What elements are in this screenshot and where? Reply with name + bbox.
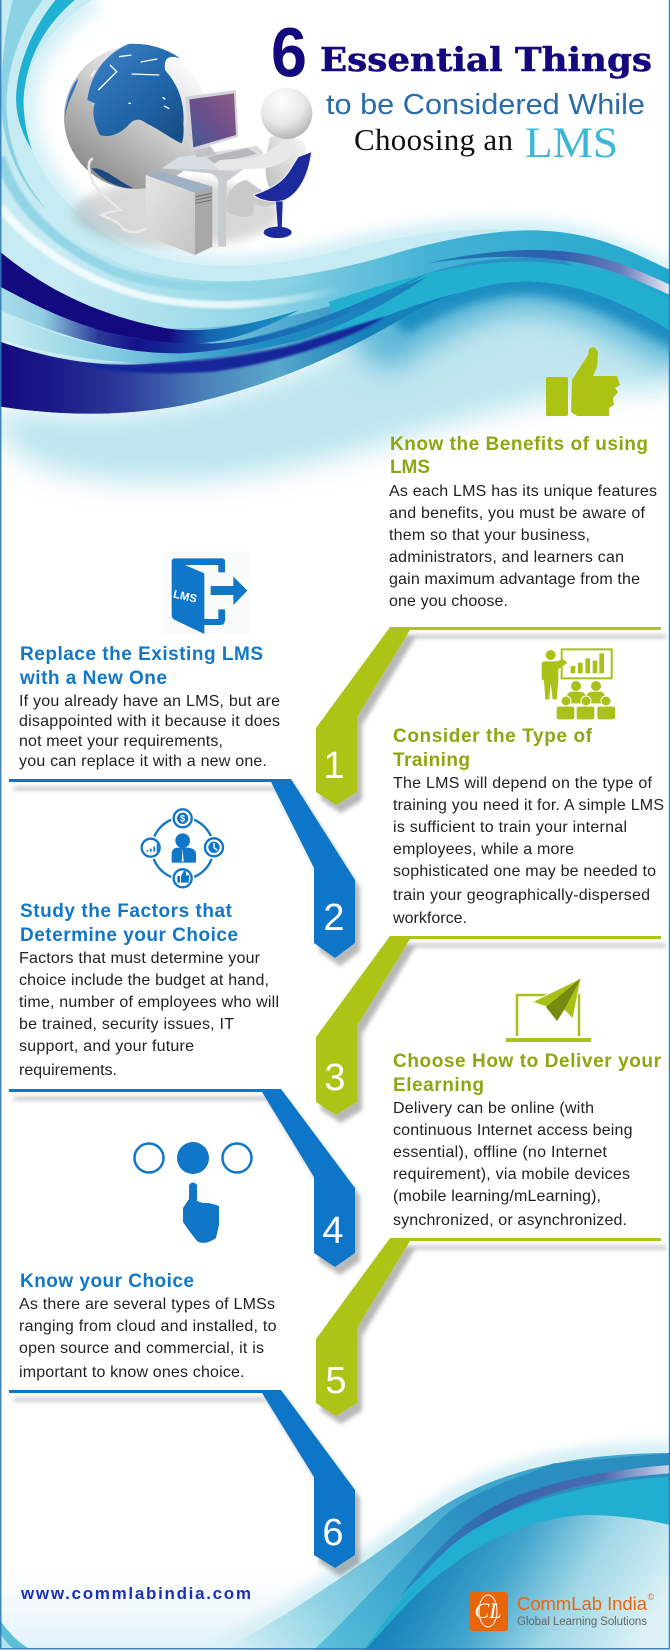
logo: CommLab India: [469, 1592, 655, 1631]
icon: computer tower: [146, 171, 212, 255]
body text: [389, 483, 657, 610]
logo name: CommLab India: [517, 1593, 648, 1614]
icon: desk: [162, 146, 263, 247]
header wave background: [0, 0, 670, 483]
title: to be Considered While: to be Considered While: [326, 89, 645, 121]
chevron 5: [316, 1238, 661, 1416]
panel: choose how to deliver: Elearning: [393, 1075, 484, 1096]
heading: Choose How to Deliver your: [393, 1051, 662, 1072]
panel: know the benefits: [389, 347, 657, 610]
body text: essential), offline (no Internet: [393, 1144, 608, 1161]
body text: gain maximum advantage from the: [389, 571, 640, 588]
body text: and benefits, you must be aware of: [389, 505, 646, 522]
icon: LMS door with arrow: LMS: [172, 589, 198, 606]
body text: requirements.: [19, 1062, 117, 1079]
panel: know the benefits: LMS: [390, 457, 430, 478]
body text: training you need it for. A simple LMS: [393, 797, 664, 814]
chevron 6: [9, 1390, 355, 1568]
body text: one you choose.: [389, 593, 508, 610]
body text: ranging from cloud and installed, to: [19, 1318, 277, 1335]
body text: As each LMS has its unique features: [389, 483, 657, 500]
body text: [392, 775, 664, 927]
icon: laptop with paper plane: [506, 978, 591, 1042]
heading: Study the Factors that: [20, 901, 233, 922]
floor shadow: [73, 180, 280, 247]
icon: presenter and audience: [542, 649, 615, 719]
title: LMS: LMS: [525, 120, 618, 167]
body text: synchronized, or asynchronized.: [393, 1212, 627, 1229]
heading: Consider the Type of: [393, 726, 593, 747]
chevron 4: [9, 1089, 355, 1267]
logo mark: CL: [475, 1598, 501, 1623]
icon: LMS door with arrow: [164, 552, 250, 634]
body text: disappointed with it because it does: [19, 713, 280, 730]
body text: Factors that must determine your: [19, 950, 261, 967]
body text: sophisticated one may be needed to: [393, 863, 656, 880]
body text: be trained, security issues, IT: [19, 1016, 234, 1033]
panel: choose how to deliver: [393, 978, 662, 1229]
body text: time, number of employees who will: [19, 994, 279, 1011]
chevron 2: 2: [323, 897, 345, 939]
chevron 2: [9, 779, 355, 958]
illustration: globe and person at computer: [64, 44, 312, 255]
chevron 3: 3: [324, 1057, 346, 1099]
body text: important to know ones choice.: [19, 1364, 244, 1381]
panel: consider the type of training: [392, 649, 664, 927]
chevron 6: 6: [322, 1512, 344, 1554]
chevron 1: 1: [323, 745, 345, 787]
body text: administrators, and learners can: [389, 549, 624, 566]
heading: Know your Choice: [20, 1271, 194, 1292]
body text: not meet your requirements,: [19, 733, 223, 750]
body text: (mobile learning/mLearning),: [393, 1188, 601, 1205]
body text: [19, 693, 280, 770]
icon: chair: [253, 152, 312, 238]
panel: replace the existing LMS: [19, 552, 280, 770]
chevron 1: [316, 627, 661, 805]
body text: you can replace it with a new one.: [19, 753, 267, 770]
registered mark: ©: [648, 1592, 655, 1602]
heading: Replace the Existing LMS: [20, 644, 263, 665]
chevron 4: 4: [322, 1210, 344, 1252]
body text: Delivery can be online (with: [393, 1100, 594, 1117]
body text: As there are several types of LMSs: [19, 1296, 275, 1313]
body text: requirement), via mobile devices: [393, 1166, 630, 1183]
body text: [393, 1100, 632, 1229]
website url: www.commlabindia.com: [20, 1584, 251, 1603]
body text: [19, 950, 279, 1079]
icon: cable: [89, 158, 147, 232]
body text: train your geographically-dispersed: [393, 887, 650, 904]
body text: choice include the budget at hand,: [19, 972, 269, 989]
body text: open source and commercial, it is: [19, 1340, 264, 1357]
panel: replace the existing LMS: with a New One: [19, 668, 167, 689]
panel: know your choice: [19, 1142, 277, 1381]
panel: consider the type of training: Training: [393, 750, 470, 771]
chevron 3: [316, 936, 661, 1115]
title: number 6: 6: [271, 14, 307, 92]
icon: thumbs up: [546, 347, 620, 416]
icon: selecting option with finger: [134, 1142, 252, 1243]
title: Essential Things: Essential Things: [320, 40, 652, 79]
body text: them so that your business,: [389, 527, 590, 544]
body text: support, and your future: [19, 1038, 194, 1055]
icon: person with factor circles: $: [180, 814, 185, 824]
panel: study the factors: Determine your Choice: [20, 925, 238, 946]
icon: globe: [64, 44, 207, 189]
logo mark: [469, 1592, 508, 1631]
title: Choosing an: Choosing an: [354, 122, 514, 157]
body text: is sufficient to train your internal: [393, 819, 627, 836]
body text: If you already have an LMS, but are: [19, 693, 280, 710]
body text: continuous Internet access being: [393, 1122, 632, 1139]
icon: person with factor circles: [141, 809, 223, 888]
body text: employees, while a more: [393, 841, 574, 858]
title: [271, 14, 652, 167]
icon: person: [213, 88, 312, 217]
body text: workforce.: [392, 910, 467, 927]
body text: The LMS will depend on the type of: [393, 775, 653, 792]
body text: [19, 1296, 277, 1381]
icon: monitor: [185, 90, 257, 165]
heading: Know the Benefits of using: [390, 434, 648, 455]
panel: study the factors: [19, 809, 279, 1079]
logo tagline: Global Learning Solutions: [517, 1616, 647, 1628]
footer wave background: [0, 1453, 670, 1650]
chevron 5: 5: [325, 1360, 347, 1402]
